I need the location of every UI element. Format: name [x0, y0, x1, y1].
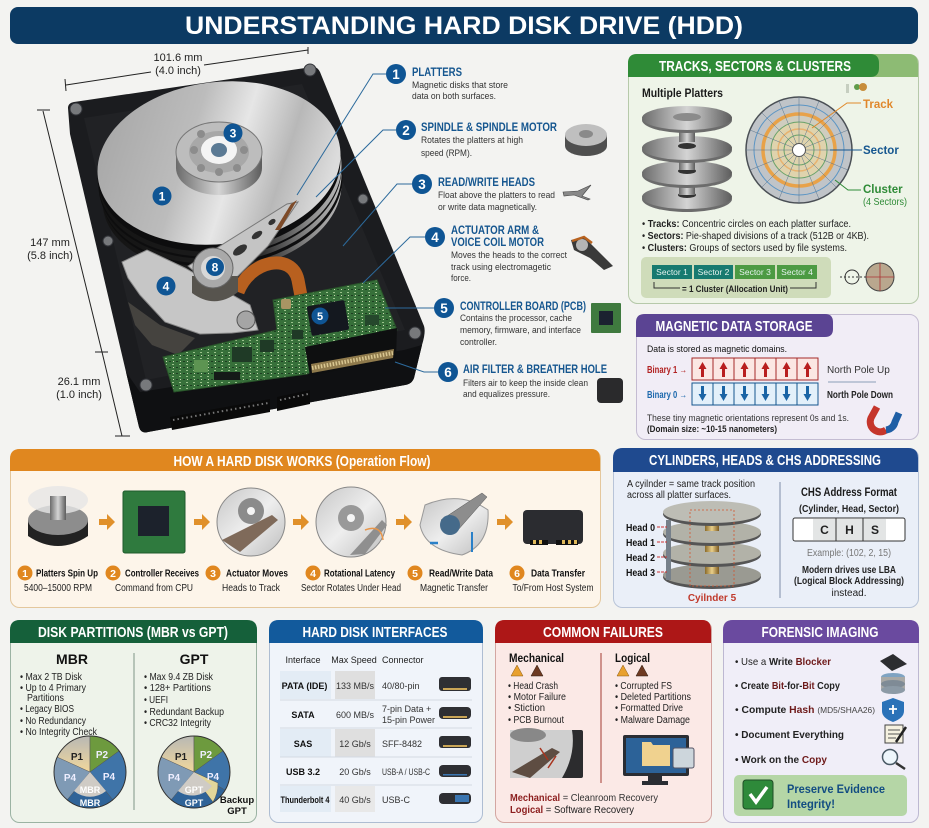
heading: FORENSIC IMAGING [762, 624, 878, 641]
table rows: 15-pin Power [382, 715, 435, 725]
mechanical column: Mechanical [509, 651, 564, 665]
head labels: Head 3 [626, 568, 655, 579]
binary 0 row: Binary 0 → [647, 390, 687, 401]
panel: common failures [495, 620, 712, 822]
checklist: • Create Bit-for-Bit Copy [735, 680, 840, 692]
step 5: Read/Write Data [429, 568, 493, 580]
step 1: 5400–15000 RPM [24, 583, 92, 594]
definitions list: • Clusters: Groups of sectors used by file systems. [642, 243, 847, 254]
callout 6: air filter [438, 362, 607, 400]
callout 5: controller: 5 [440, 301, 448, 316]
heading: DISK PARTITIONS (MBR vs GPT) [38, 624, 228, 641]
mechanical column: • PCB Burnout [508, 715, 564, 726]
callout 5: controller [434, 298, 586, 348]
definitions list: • Sectors: Pie-shaped divisions of a track (512B or 4KB). [642, 231, 869, 242]
icon: air filter [597, 378, 623, 403]
mbr column: • Legacy BIOS [20, 704, 74, 715]
icon: write blocker [880, 654, 907, 671]
table rows: SAS [294, 739, 312, 749]
mbr pie chart: P4 [103, 772, 116, 783]
mechanical column: • Stiction [508, 703, 545, 714]
callout: preserve evidence integrity [734, 775, 907, 816]
step 2: Controller Receives [125, 568, 199, 580]
gpt column: • Redundant Backup [144, 707, 224, 718]
leader lines [297, 74, 438, 372]
label: track [812, 99, 894, 128]
dimension: length: 147 mm [30, 237, 70, 249]
cluster diagram: Sector 3 [739, 267, 771, 277]
step 4 [301, 487, 401, 594]
logical column: • Corrupted FS [615, 681, 672, 692]
explanation text: These tiny magnetic orientations represent 0s and 1s. [647, 413, 849, 424]
dimension: height [56, 352, 130, 436]
definition: A cyilnder = same track position [627, 479, 755, 490]
step 1: 1 [22, 568, 28, 580]
mechanical column [508, 651, 566, 726]
icon: disk sketch [840, 263, 894, 291]
step 6: Data Transfer [531, 568, 585, 580]
actuator plate [128, 302, 195, 355]
table header: Max Speed [331, 655, 377, 665]
mbr column: MBR [56, 651, 88, 667]
callout 6: air filter: Filters air to keep the inside clean [463, 378, 588, 389]
icon: document [885, 725, 906, 743]
table rows: 20 Gb/s [339, 767, 371, 777]
callout 4: actuator: ACTUATOR ARM & [451, 223, 539, 237]
step 5: 5 [412, 568, 418, 580]
label: sector: Sector [863, 145, 899, 157]
definitions list [642, 219, 869, 254]
step 4: 4 [310, 568, 316, 580]
step 3 [206, 488, 288, 594]
cluster diagram [641, 257, 831, 298]
drive connectors [170, 328, 397, 430]
chs format: (Logical Block Addressing) [794, 576, 904, 587]
binary 1 row: Binary 1 → [647, 365, 687, 376]
callout 4: actuator: Moves the heads to the correct [451, 250, 567, 261]
callout: preserve evidence integrity: Integrity! [787, 797, 835, 811]
table header: Interface [285, 655, 321, 665]
icon: actuator [571, 237, 613, 270]
connector icons [439, 677, 471, 804]
logical column: • Deleted Partitions [615, 692, 691, 703]
scribble mark [846, 83, 867, 93]
dimension: length [27, 110, 102, 352]
numbered badges on drive: 8 [212, 260, 219, 274]
numbered badges on drive: 4 [163, 280, 170, 294]
icon: read/write head [563, 185, 591, 200]
mbr pie chart: P2 [96, 750, 109, 761]
backup gpt label: Backup [220, 795, 254, 806]
callout 4: actuator: track using electromagetic [451, 262, 551, 273]
numbered badges on drive [152, 124, 328, 324]
icon: horseshoe magnet [870, 407, 899, 432]
table rows: SATA [291, 710, 315, 720]
callout 5: controller: Contains the processor, cache [460, 313, 572, 324]
head labels: Head 0 [626, 523, 655, 534]
callout 4: actuator: force. [451, 273, 471, 284]
checklist: • Compute Hash (MD5/SHAA26) [735, 704, 875, 716]
chs format: (Cylinder, Head, Sector) [799, 503, 899, 515]
callout 6: air filter: AIR FILTER & BREATHER HOLE [463, 362, 607, 376]
callout 1: platters: data on both surfaces. [412, 91, 496, 102]
gpt column: • CRC32 Integrity [144, 718, 211, 729]
mechanical column: • Motor Failure [508, 692, 566, 703]
gpt column [144, 651, 224, 729]
sector disk diagram [746, 97, 852, 203]
callout 3: heads: 3 [418, 177, 426, 192]
callout 2: spindle: 2 [402, 123, 410, 138]
numbered badges on drive: 3 [230, 126, 237, 140]
step 5: Magnetic Transfer [420, 583, 489, 594]
step 4: Sector Rotates Under Head [301, 583, 401, 594]
label: track: Track [863, 99, 894, 111]
step 6: 6 [514, 568, 520, 580]
drive chassis [68, 67, 425, 432]
gpt column: GPT [180, 651, 209, 667]
numbered badges on drive: 5 [317, 311, 323, 323]
flex cable [238, 263, 301, 296]
label: sector [830, 145, 899, 157]
explanation text [647, 413, 849, 435]
mbr pie chart: MBR [80, 785, 101, 795]
panel: how a hard disk works [10, 449, 600, 608]
head labels: Head 1 [626, 538, 655, 549]
panel: magnetic data storage [636, 314, 918, 440]
chs format: instead. [831, 588, 867, 599]
table rows: PATA (IDE) [282, 681, 327, 691]
gpt pie chart: P4 [168, 773, 181, 784]
arrow [293, 514, 309, 530]
intro text: Data is stored as magnetic domains. [647, 344, 787, 355]
step 3: 3 [210, 568, 216, 580]
gpt pie chart: P4 [207, 772, 220, 783]
logical column: • Malware Damage [615, 715, 690, 726]
definition [627, 479, 755, 501]
table rows: 133 MB/s [336, 681, 375, 691]
label: cluster: Cluster [863, 184, 903, 196]
arrow [194, 514, 210, 530]
dimension: height: 26.1 mm [58, 376, 100, 388]
heading: HOW A HARD DISK WORKS (Operation Flow) [174, 453, 430, 470]
checklist [735, 656, 875, 766]
callout 1: platters [386, 64, 508, 102]
checklist: • Use a Write Blocker [735, 656, 831, 668]
step 1: Platters Spin Up [36, 568, 98, 580]
mbr column: • No Redundancy [20, 716, 86, 727]
callout 6: air filter: 6 [444, 365, 452, 380]
callout 1: platters: Magnetic disks that store [412, 80, 508, 91]
table rows: USB-C [382, 795, 411, 805]
hard drive illustration [68, 64, 425, 432]
callout 4: actuator [425, 223, 567, 284]
gpt pie chart [158, 736, 230, 808]
step 3: Actuator Moves [226, 568, 288, 580]
platter stack [88, 68, 352, 285]
binary 0 row [647, 382, 893, 405]
callout 5: controller: controller. [460, 337, 497, 348]
callout 4: actuator: VOICE COIL MOTOR [451, 235, 544, 249]
binary 1 row [647, 358, 890, 380]
mbr pie chart: P4 [64, 773, 77, 784]
mbr column: • Up to 4 Primary [20, 683, 86, 694]
icon: database [881, 673, 905, 694]
heading: TRACKS, SECTORS & CLUSTERS [659, 58, 851, 75]
head labels [626, 523, 667, 579]
chs format: Modern drives use LBA [802, 565, 896, 576]
table rows: 40/80-pin [382, 681, 420, 691]
step 3: Heads to Track [222, 583, 281, 594]
callout 6: air filter: and equalizes pressure. [463, 389, 550, 400]
cylinder stack [663, 501, 761, 589]
table rows: USB-A / USB-C [382, 767, 430, 777]
numbered badges on drive: 1 [159, 190, 166, 204]
table rows: SFF-8482 [382, 739, 422, 749]
chs format: C [820, 523, 829, 537]
step 2: Command from CPU [115, 583, 193, 594]
controller board [163, 280, 397, 392]
label: cluster: (4 Sectors) [863, 197, 907, 208]
callout 4: actuator: 4 [431, 230, 439, 245]
logical column [615, 651, 691, 726]
callout 3: heads: or write data magnetically. [438, 202, 537, 213]
damaged disk image [510, 728, 583, 778]
chs format: CHS Address Format [801, 487, 897, 499]
chs format: S [871, 523, 879, 537]
heading: COMMON FAILURES [543, 624, 663, 641]
callout: preserve evidence integrity: Preserve Evidence [787, 782, 885, 796]
callout 3: heads: READ/WRITE HEADS [438, 175, 535, 189]
table header [285, 655, 424, 665]
dimension: width [65, 47, 308, 91]
panel: cylinders heads chs [613, 448, 918, 608]
dimension: height: (1.0 inch) [56, 389, 102, 401]
gpt column: • 128+ Partitions [144, 683, 211, 694]
gpt pie chart: P2 [200, 750, 213, 761]
step 6: To/From Host System [512, 583, 594, 594]
heading: HARD DISK INTERFACES [302, 624, 448, 641]
mbr column: Partitions [27, 693, 64, 704]
chs format: H [845, 523, 854, 537]
binary 0 row: North Pole Down [827, 390, 893, 401]
logical column: • Formatted Drive [615, 703, 683, 714]
callout 2: spindle [396, 120, 557, 159]
step 6 [510, 510, 594, 594]
callout 5: controller: memory, firmware, and interface [460, 325, 581, 336]
cylinder label: Cyilnder 5 [688, 593, 737, 604]
definitions list: • Tracks: Concentric circles on each platter surface. [642, 219, 851, 230]
binary 1 row: North Pole Up [827, 365, 890, 376]
gpt pie chart: GPT [185, 785, 204, 795]
icon: spindle motor [565, 124, 607, 156]
mbr column: • No Integrity Check [20, 727, 98, 738]
mbr pie chart: P1 [71, 752, 84, 763]
heading: MAGNETIC DATA STORAGE [656, 318, 812, 335]
arrow [396, 514, 412, 530]
definition: across all platter surfaces. [627, 490, 731, 501]
cluster diagram: = 1 Cluster (Allocation Unit) [682, 284, 788, 295]
title banner: UNDERSTANDING HARD DISK DRIVE (HDD) [185, 12, 743, 40]
step 1 [18, 486, 98, 594]
gpt pie chart: P1 [175, 752, 188, 763]
mbr column: • Max 2 TB Disk [20, 672, 83, 683]
checklist: • Work on the Copy [735, 754, 827, 766]
dimension: width: 101.6 mm [154, 52, 202, 64]
recovery summary: Logical = Software Recovery [510, 805, 634, 816]
gpt column: • Max 9.4 ZB Disk [144, 672, 214, 683]
mbr column [20, 651, 98, 738]
mechanical column: • Head Crash [508, 681, 558, 692]
step 2: 2 [110, 568, 116, 580]
head labels: Head 2 [626, 553, 655, 564]
cluster diagram: Sector 4 [781, 267, 813, 277]
callout 2: spindle: Rotates the platters at high [421, 135, 523, 146]
table rows: 12 Gb/s [339, 739, 371, 749]
infected monitor image [623, 735, 694, 785]
step 4: Rotational Latency [324, 568, 395, 580]
logical column: Logical [615, 651, 650, 665]
recovery summary: Mechanical = Cleanroom Recovery [510, 793, 658, 804]
multiple platters: Multiple Platters [642, 86, 723, 100]
checklist: • Document Everything [735, 729, 844, 741]
chs format: Example: (102, 2, 15) [807, 548, 891, 559]
cluster diagram: Sector 1 [656, 267, 688, 277]
table rows: 40 Gb/s [339, 795, 371, 805]
cluster diagram: Sector 2 [698, 267, 730, 277]
table rows: 600 MB/s [336, 710, 375, 720]
table header: Connector [382, 655, 424, 665]
callout 5: controller: CONTROLLER BOARD (PCB) [460, 299, 586, 313]
mbr pie chart [54, 736, 126, 808]
dimension: width: (4.0 inch) [155, 65, 201, 77]
icon: shield [882, 698, 904, 722]
gpt pie chart: GPT [185, 798, 204, 808]
callout 3: heads: Float above the platters to read [438, 190, 555, 201]
panel: hard disk interfaces [269, 620, 483, 822]
callout 2: spindle: SPINDLE & SPINDLE MOTOR [421, 120, 557, 134]
callout 2: spindle: speed (RPM). [421, 148, 472, 159]
actuator arm [188, 202, 298, 284]
mbr pie chart: MBR [80, 798, 101, 808]
callout 1: platters: PLATTERS [412, 65, 462, 79]
callout 1: platters: 1 [392, 67, 400, 82]
spindle hub [176, 122, 262, 195]
table rows: USB 3.2 [286, 767, 320, 777]
explanation text: (Domain size: ~10-15 nanometers) [647, 424, 777, 435]
label: cluster [835, 180, 907, 208]
screws [70, 64, 421, 391]
callout 3: heads [412, 174, 555, 213]
step 2 [106, 491, 199, 594]
backup gpt label: GPT [227, 806, 247, 817]
panel: forensic imaging [723, 620, 919, 822]
arrow [497, 514, 513, 530]
backup gpt label [220, 795, 254, 817]
gpt column: • UEFI [144, 695, 168, 706]
recovery summary [510, 793, 658, 816]
panel: tracks, sectors and clusters [628, 54, 918, 304]
icon: pcb chip [591, 303, 621, 333]
table rows: Thunderbolt 4 [280, 795, 330, 805]
step 5 [408, 493, 493, 594]
table rows: 7-pin Data + [382, 704, 431, 714]
chs format [793, 487, 905, 599]
icon: magnifier [882, 750, 905, 769]
title banner [10, 7, 918, 44]
arrow [99, 514, 115, 530]
panel: disk partitions [10, 620, 257, 822]
dimension: length: (5.8 inch) [27, 250, 73, 262]
multiple platters [642, 86, 732, 212]
table rows [280, 671, 472, 812]
